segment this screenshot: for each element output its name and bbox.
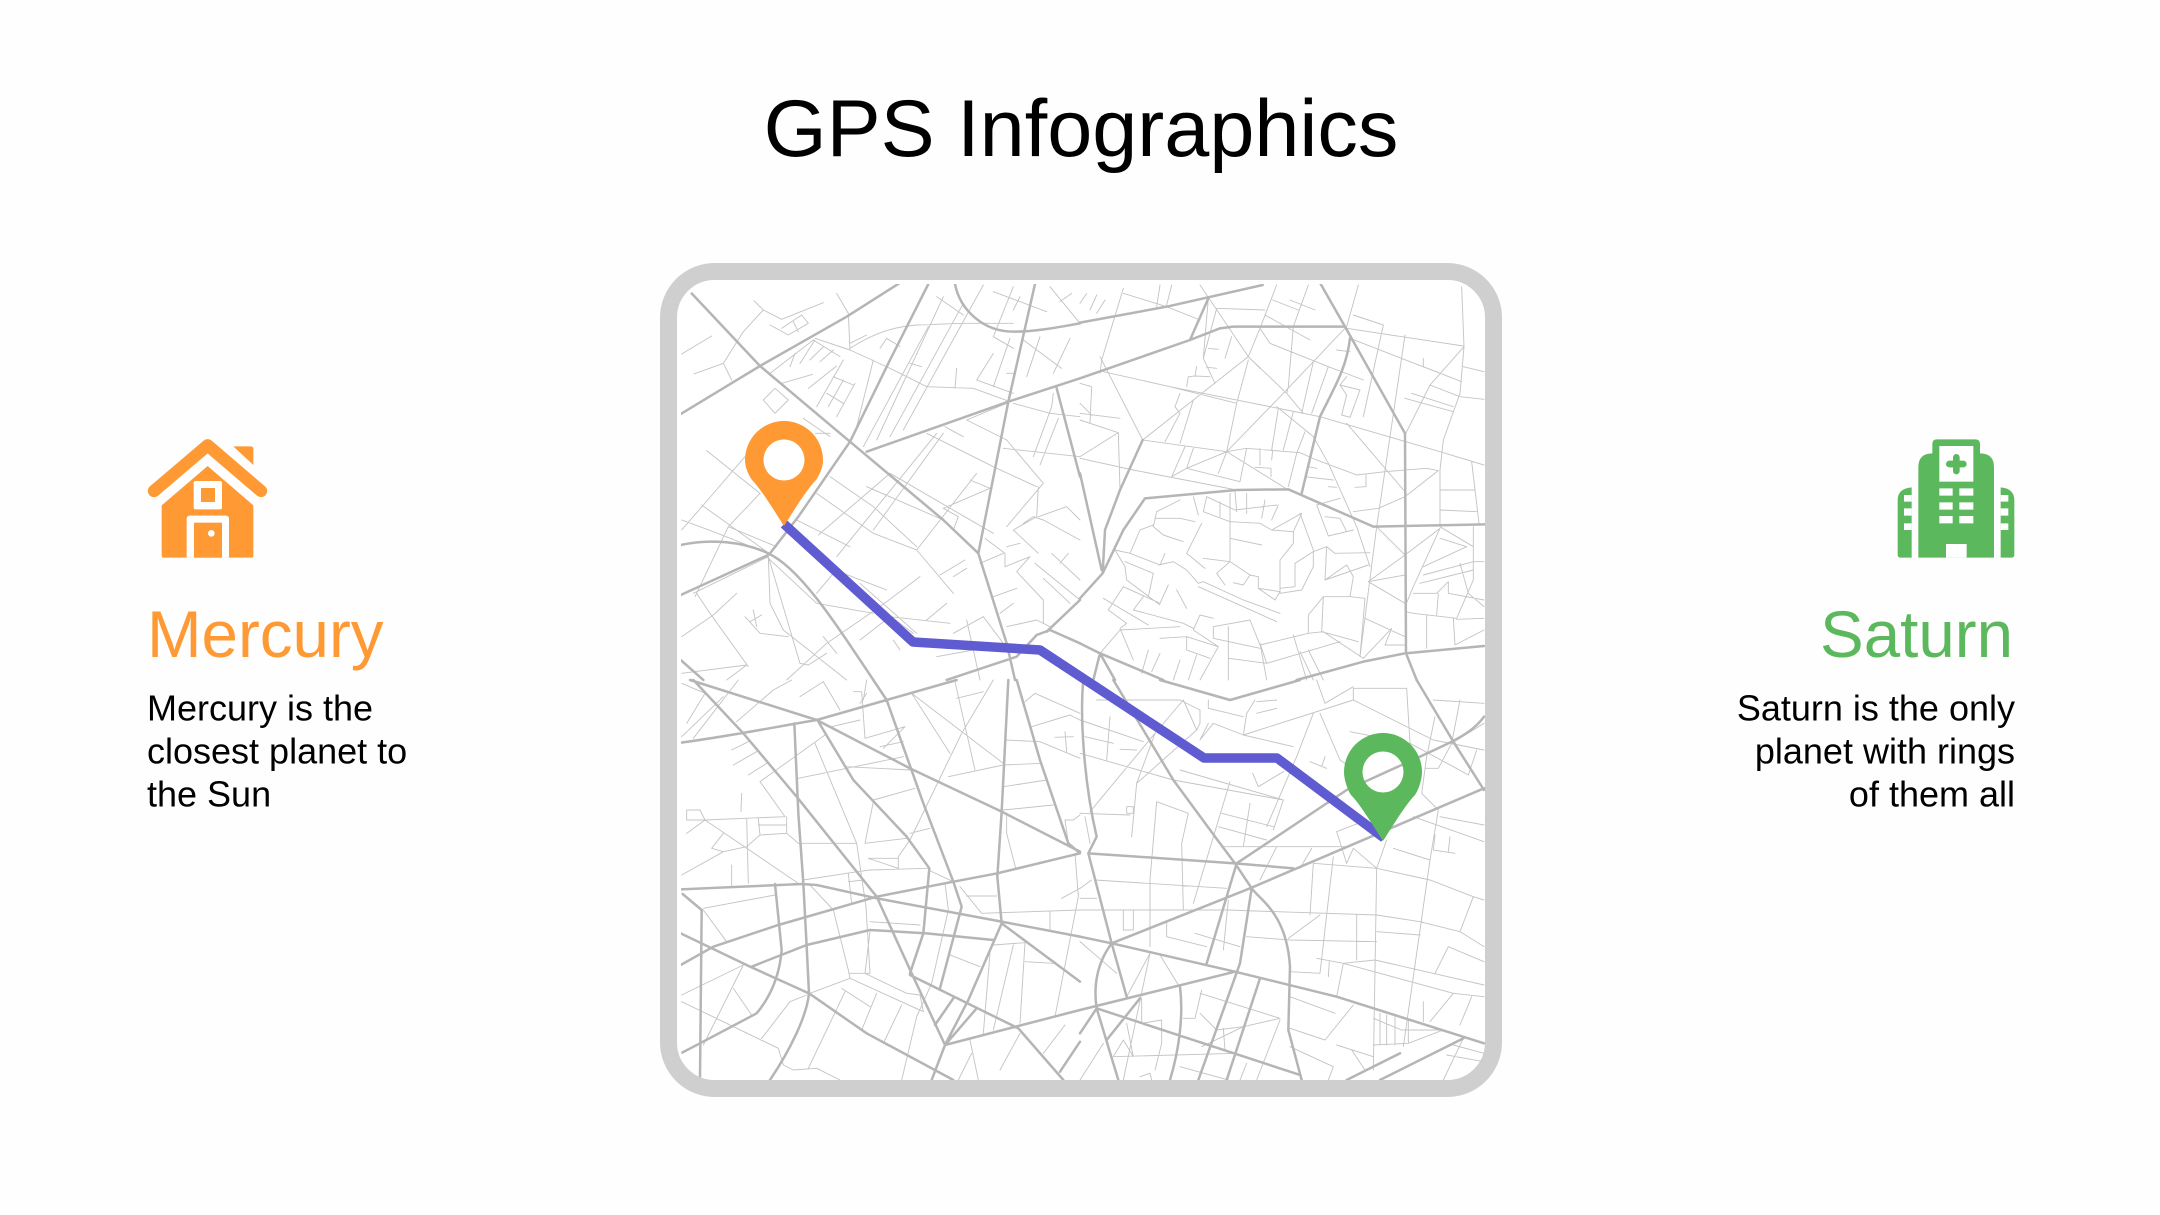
panel: Saturn	[1737, 439, 2015, 814]
heading: Saturn: Saturn	[1820, 598, 2013, 671]
text: Saturn description: Saturn is the only	[1737, 688, 2015, 728]
street map	[681, 281, 1485, 1080]
green destination pin	[1344, 733, 1422, 841]
text: Mercury description: closest planet to	[147, 730, 407, 772]
text: Mercury description: Mercury is the	[147, 688, 373, 728]
icon: house	[154, 445, 261, 558]
orange start pin	[745, 421, 823, 526]
icon: hospital	[1898, 439, 2014, 558]
panel: map frame	[668, 272, 1494, 1088]
route line	[784, 524, 1384, 838]
panel: Mercury	[147, 445, 407, 814]
text: Mercury description: the Sun	[147, 774, 271, 814]
text: Saturn description: planet with rings	[1755, 730, 2015, 772]
heading: Mercury: Mercury	[147, 598, 384, 671]
text: Saturn description: of them all	[1849, 774, 2015, 814]
title: GPS Infographics	[764, 84, 1398, 174]
